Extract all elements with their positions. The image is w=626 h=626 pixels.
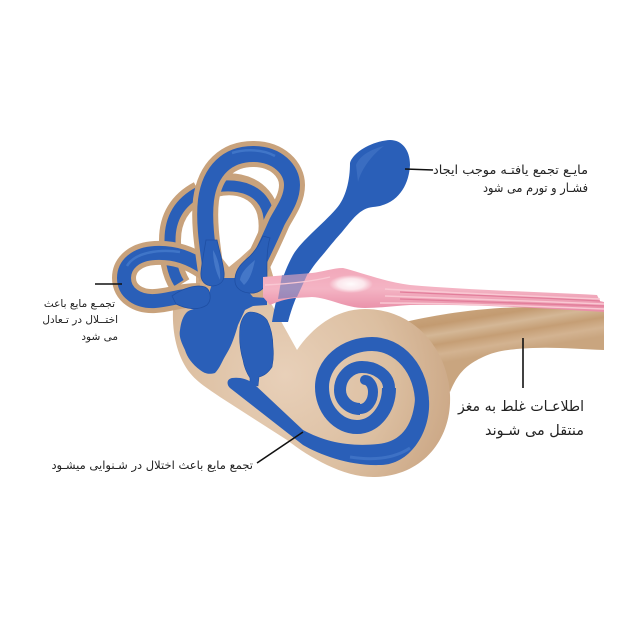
nerve white swelling <box>329 275 373 293</box>
endolymphatic sac and duct <box>272 140 410 322</box>
cochlear spiral <box>228 344 429 465</box>
posterior canal fluid <box>170 186 270 283</box>
inner ear body: bony labyrinth and cochlea <box>173 285 450 477</box>
basal highlight <box>350 448 410 459</box>
label: endolymphatic fluid: فشـار و تورم می شود <box>483 180 588 196</box>
tan base behind ampullae <box>196 238 280 305</box>
spiral outer turn <box>322 344 422 454</box>
ampulla highlight <box>213 250 255 285</box>
duct and sac head <box>272 140 410 322</box>
label: balance: می شود <box>81 331 118 343</box>
spiral middle turn <box>340 367 389 409</box>
leader line: left <box>95 283 122 285</box>
ampulla left <box>201 240 224 286</box>
label: balance: تجمـع مایع باعث <box>44 298 115 310</box>
label: wrong information to brain: اطلاعـات غلط به مغز <box>457 399 584 415</box>
leader line: top right <box>405 169 433 170</box>
vestibule: saccule <box>240 312 273 386</box>
lateral canal casing <box>124 253 205 301</box>
nerve fibre lines <box>265 277 604 309</box>
semicircular canals <box>124 150 292 301</box>
nerve: tan cochlear nerve <box>405 307 604 392</box>
sac highlight <box>356 146 384 182</box>
vestibule: utricle <box>180 278 267 374</box>
label: endolymphatic fluid <box>433 162 588 196</box>
superior canal fluid <box>205 154 292 280</box>
lateral canal fluid <box>124 253 205 301</box>
ampulla right <box>235 236 270 293</box>
nerve darker fibres <box>400 292 604 306</box>
superior canal casing <box>205 154 292 280</box>
lateral ampulla <box>172 286 210 309</box>
label: endolymphatic fluid: مایـع تجمع یافتـه موجب ایجاد <box>433 162 588 178</box>
label: balance <box>42 298 118 343</box>
leader line: right <box>522 338 524 388</box>
spiral tip <box>360 380 373 409</box>
posterior canal casing <box>170 184 270 285</box>
label: hearing: تجمع مایع باعث اختلال در شـنوایی میشـود <box>51 458 253 473</box>
label: wrong information to brain: منتقل می شـوند <box>485 423 584 439</box>
duct seen through the bundle <box>278 273 308 299</box>
leader line: bottom <box>257 432 303 463</box>
label: balance: اختــلال در تـعادل <box>42 314 118 326</box>
basal turn <box>228 378 429 465</box>
pink bundle body <box>263 268 604 312</box>
label: wrong information to brain <box>457 399 584 439</box>
nerve: vestibular pink bundle <box>263 268 604 312</box>
canal highlight <box>127 150 275 266</box>
